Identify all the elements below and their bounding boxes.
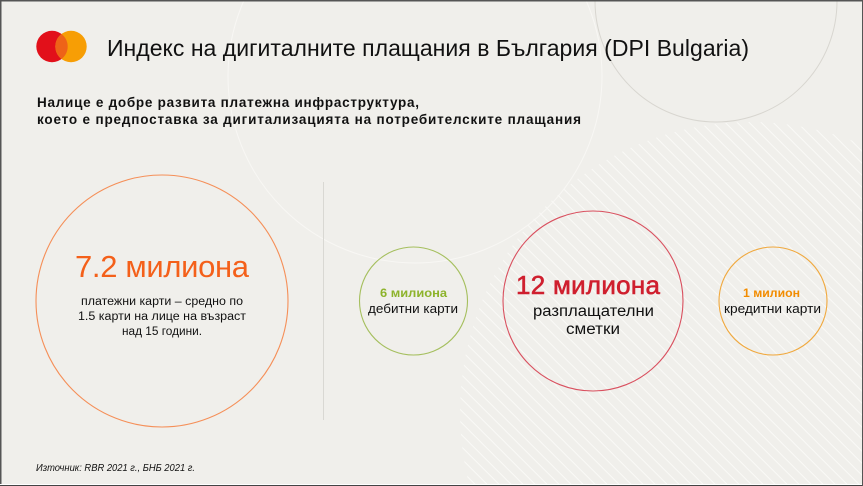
source note: Източник: RBR 2021 г., БНБ 2021 г. bbox=[36, 463, 195, 474]
panel: payment accounts circle: 12 милиона bbox=[516, 270, 661, 300]
panel: credit cards circle: 1 милион bbox=[743, 286, 800, 300]
panel: debit cards circle bbox=[360, 247, 468, 355]
subheading: Налице е добре развита платежна инфраструктура, bbox=[37, 95, 419, 110]
panel: payment cards circle: 7.2 милиона bbox=[75, 249, 250, 284]
panel: debit cards circle: 6 милиона bbox=[380, 286, 447, 300]
panel: credit cards circle: кредитни карти bbox=[724, 301, 821, 316]
icon: Mastercard logo bbox=[36, 31, 87, 62]
panel: credit cards circle bbox=[719, 247, 827, 355]
panel: payment cards circle: 1.5 карти на лице на възраст bbox=[78, 311, 247, 323]
panel: payment accounts circle: сметки bbox=[566, 321, 620, 338]
subheading: което е предпоставка за дигитализацията на потребителските плащания bbox=[37, 112, 581, 127]
panel: payment cards circle: платежни карти – средно по bbox=[81, 296, 243, 308]
subheading bbox=[37, 95, 581, 127]
panel: payment cards circle: над 15 години. bbox=[122, 326, 202, 338]
panel: debit cards circle: дебитни карти bbox=[368, 301, 458, 316]
panel: payment accounts circle: разплащателни bbox=[533, 303, 654, 320]
title: Индекс на дигиталните плащания в България (DPI Bulgaria) bbox=[107, 35, 749, 61]
panel: payment cards circle bbox=[36, 175, 288, 427]
panel: payment accounts circle bbox=[503, 211, 683, 391]
